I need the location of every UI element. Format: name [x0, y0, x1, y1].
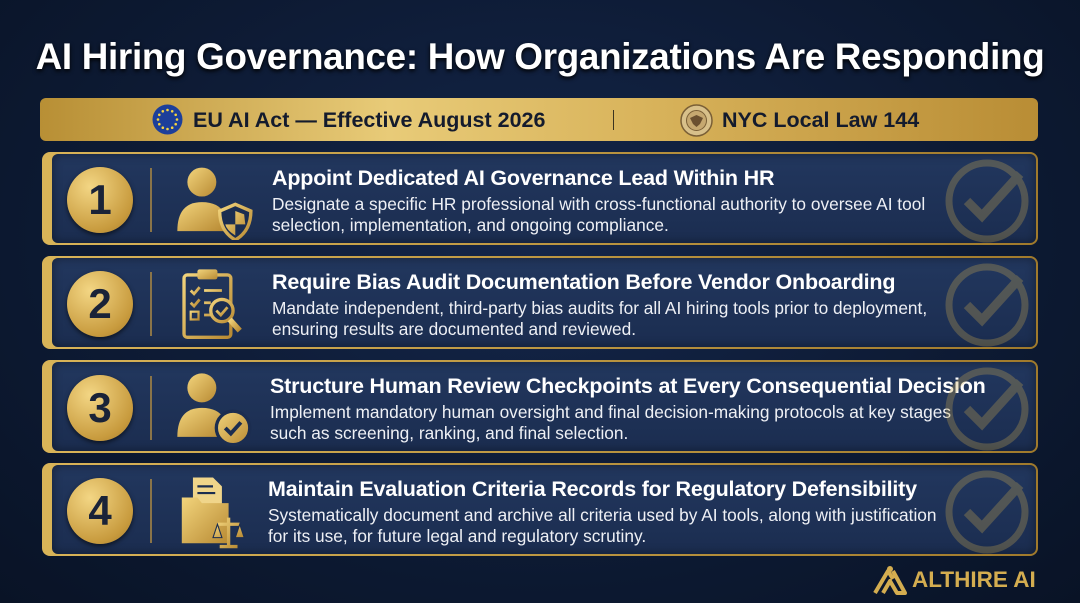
description 2: ensuring results are documented and reviewed.	[272, 319, 636, 339]
description 4: for its use, for future legal and regulatory scrutiny.	[268, 526, 646, 546]
icon: person with shield	[177, 168, 253, 240]
number 3	[67, 375, 133, 441]
description 1: Designate a specific HR professional with cross-functional authority to oversee AI tool	[272, 194, 925, 214]
description 1: selection, implementation, and ongoing compliance.	[272, 215, 669, 235]
title: AI Hiring Governance: How Organizations Are Responding	[36, 36, 1044, 77]
number 4: 4	[88, 487, 112, 534]
text: EU AI Act: EU AI Act — Effective August 2026	[193, 108, 545, 132]
icon: folder with scales	[182, 478, 244, 548]
description 3	[270, 402, 951, 443]
number 2: 2	[88, 280, 112, 327]
number 1: 1	[88, 176, 112, 223]
icon: check watermark	[946, 470, 1028, 554]
heading 3: Structure Human Review Checkpoints at Every Consequential Decision	[270, 374, 986, 398]
icon: EU flag	[152, 104, 182, 134]
heading 2: Require Bias Audit Documentation Before Vendor Onboarding	[272, 270, 895, 294]
description 2	[272, 298, 927, 339]
icon: check watermark	[946, 264, 1028, 346]
icon: check watermark	[946, 160, 1028, 242]
logo: Althire AI	[873, 566, 1036, 595]
icon: check watermark	[946, 368, 1028, 450]
card 1	[42, 152, 1038, 245]
text: brand: ALTHIRE AI	[912, 567, 1036, 592]
banner: regulations	[40, 98, 1038, 141]
text: NYC Local Law 144: NYC Local Law 144	[722, 108, 919, 132]
card 4	[42, 463, 1038, 556]
heading 1: Appoint Dedicated AI Governance Lead Within HR	[272, 166, 774, 190]
description 3: Implement mandatory human oversight and final decision-making protocols at key stages	[270, 402, 951, 422]
icon: NYC seal	[680, 104, 713, 137]
description 3: such as screening, ranking, and final selection.	[270, 423, 628, 443]
number 1	[67, 167, 133, 233]
description 4: Systematically document and archive all criteria used by AI tools, along with justification	[268, 505, 937, 525]
card 3	[42, 360, 1038, 453]
icon: logo mark	[873, 566, 907, 595]
heading 4: Maintain Evaluation Criteria Records for Regulatory Defensibility	[268, 477, 917, 501]
description 4	[268, 505, 937, 546]
description 1	[272, 194, 925, 235]
icon: clipboard with magnifier	[182, 269, 242, 339]
number 3: 3	[88, 384, 112, 431]
number 4	[67, 478, 133, 544]
description 2: Mandate independent, third-party bias audits for all AI hiring tools prior to deployment,	[272, 298, 927, 318]
number 2	[67, 271, 133, 337]
icon: person with check	[177, 373, 248, 443]
card 2	[42, 256, 1038, 349]
